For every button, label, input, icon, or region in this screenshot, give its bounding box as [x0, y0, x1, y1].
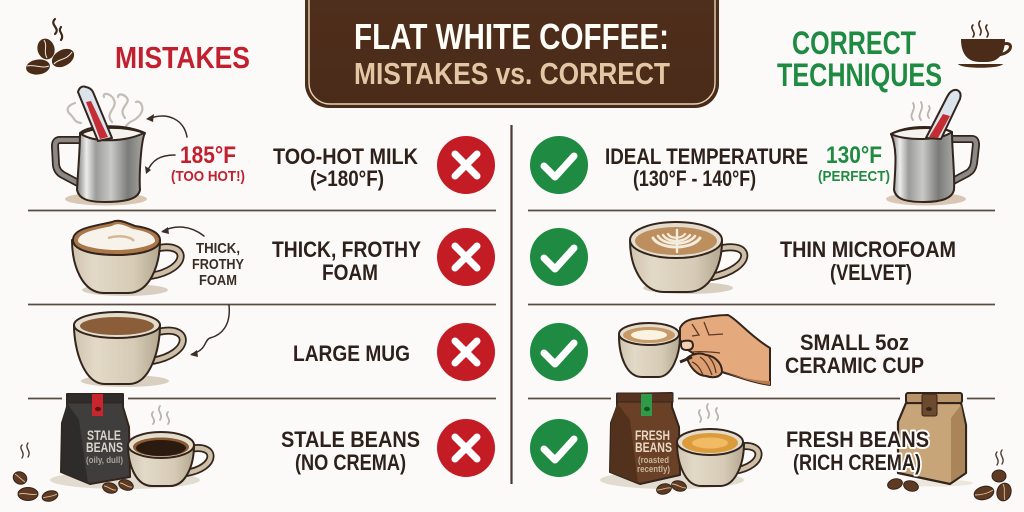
icon: x mark row 2 — [437, 228, 495, 286]
text: small 5oz ceramic cup — [785, 330, 924, 378]
bag — [610, 393, 680, 484]
row 1 right: ideal pitcher — [886, 90, 976, 206]
icon: beans and steam bottom left — [11, 443, 59, 503]
steam — [152, 406, 169, 424]
text: stale beans: (NO CREMA) — [295, 450, 406, 475]
text: stale beans: STALE BEANS — [281, 427, 420, 452]
label: 185F too hot: (TOO HOT!) — [171, 168, 245, 185]
cup — [734, 446, 759, 471]
label: 130F perfect — [818, 142, 890, 185]
text: too-hot milk — [273, 144, 418, 191]
row 2 right: cup with latte art — [630, 222, 744, 294]
heading: mistakes: MISTAKES — [115, 40, 250, 75]
cup handle — [680, 357, 692, 362]
label: 130F perfect: 130°F — [826, 142, 882, 169]
row 2 left: cup with thick foam — [72, 221, 181, 296]
text: thick frothy foam: FOAM — [322, 260, 378, 285]
icon: check mark row 2 — [530, 228, 588, 286]
heading: correct techniques: TECHNIQUES — [777, 57, 942, 93]
bag label — [635, 428, 672, 474]
icon: check mark row 3 — [530, 323, 588, 381]
title banner — [305, 0, 719, 108]
hand — [680, 315, 770, 385]
row 4 right: fresh beans bag and cup — [600, 393, 759, 496]
bag label: BEANS — [635, 440, 672, 455]
bag label — [86, 428, 123, 465]
row 3 right: hand holding small cup — [619, 315, 770, 385]
label: 185F too hot — [171, 142, 245, 185]
label: thick frothy foam small: THICK, — [196, 240, 240, 257]
steam — [68, 94, 142, 134]
loose beans — [101, 481, 119, 495]
label: thick frothy foam small: FROTHY — [192, 256, 244, 273]
text: thin microfoam: (VELVET) — [830, 260, 912, 285]
thermometer — [78, 87, 112, 141]
text: thin microfoam — [780, 237, 956, 285]
text: large mug: LARGE MUG — [293, 341, 410, 366]
bag label: (roasted — [638, 455, 669, 465]
bag label: FRESH — [635, 428, 670, 443]
icon: beans and steam bottom right — [886, 450, 1013, 503]
text: fresh beans — [786, 427, 929, 475]
icon: x mark row 3 — [437, 323, 495, 381]
text: small 5oz ceramic cup: CERAMIC CUP — [785, 353, 924, 378]
icon: coffee beans with steam — [25, 19, 77, 76]
text: too-hot milk: (>180°F) — [310, 166, 384, 191]
arrow: large mug callout — [190, 305, 229, 357]
thumb — [681, 341, 693, 350]
icon: x mark row 4 — [437, 419, 495, 477]
text: ideal temperature: (130°F - 140°F) — [633, 166, 756, 191]
text: too-hot milk: TOO-HOT MILK — [273, 144, 418, 169]
text: fresh beans: FRESH BEANS — [786, 427, 929, 452]
label: 185F too hot: 185°F — [180, 142, 236, 169]
icon: coffee cup on saucer — [958, 21, 1010, 68]
text: ideal temperature — [605, 144, 808, 191]
text: thin microfoam: THIN MICROFOAM — [780, 237, 956, 262]
bag label: (oily, dull) — [86, 455, 123, 465]
row 4 left: stale beans bag and cup — [50, 394, 211, 495]
label: thick frothy foam small: FOAM — [199, 272, 237, 289]
text: small 5oz ceramic cup: SMALL 5oz — [800, 330, 909, 355]
heading: correct techniques — [777, 25, 942, 93]
text: ideal temperature: IDEAL TEMPERATURE — [605, 144, 808, 169]
bag label: recently) — [637, 464, 670, 474]
loose beans — [655, 482, 673, 496]
heading: correct techniques: CORRECT — [792, 25, 916, 61]
text: thick frothy foam — [272, 237, 421, 285]
label: thick frothy foam small — [192, 240, 244, 289]
label: 130F perfect: (PERFECT) — [818, 168, 890, 185]
bag — [61, 394, 130, 484]
fingers — [687, 354, 722, 377]
text: thick frothy foam: THICK, FROTHY — [272, 237, 421, 262]
text: stale beans — [281, 427, 420, 475]
steam — [699, 404, 718, 422]
arrow: foam callout — [161, 227, 204, 236]
kraft paper bag — [897, 393, 973, 486]
center divider — [510, 125, 513, 484]
icon: check mark row 4 — [530, 419, 588, 477]
thermometer — [926, 90, 961, 139]
bag label: BEANS — [86, 440, 123, 455]
icon: x mark row 1 — [437, 136, 495, 194]
cup — [186, 448, 211, 473]
row dividers — [28, 210, 995, 398]
text: fresh beans: (RICH CREMA) — [793, 450, 921, 475]
row 1 left: hot milk pitcher — [55, 87, 147, 206]
row 3 left: large mug — [74, 312, 183, 387]
cup — [619, 336, 680, 377]
title line 1: FLAT WHITE COFFEE: — [354, 16, 669, 57]
latte art — [653, 230, 700, 252]
title line 2: MISTAKES vs. CORRECT — [354, 56, 670, 91]
icon: check mark row 1 — [530, 136, 588, 194]
steam — [911, 102, 930, 120]
arrows: hot milk callouts — [145, 114, 187, 174]
bag label: STALE — [87, 428, 121, 443]
